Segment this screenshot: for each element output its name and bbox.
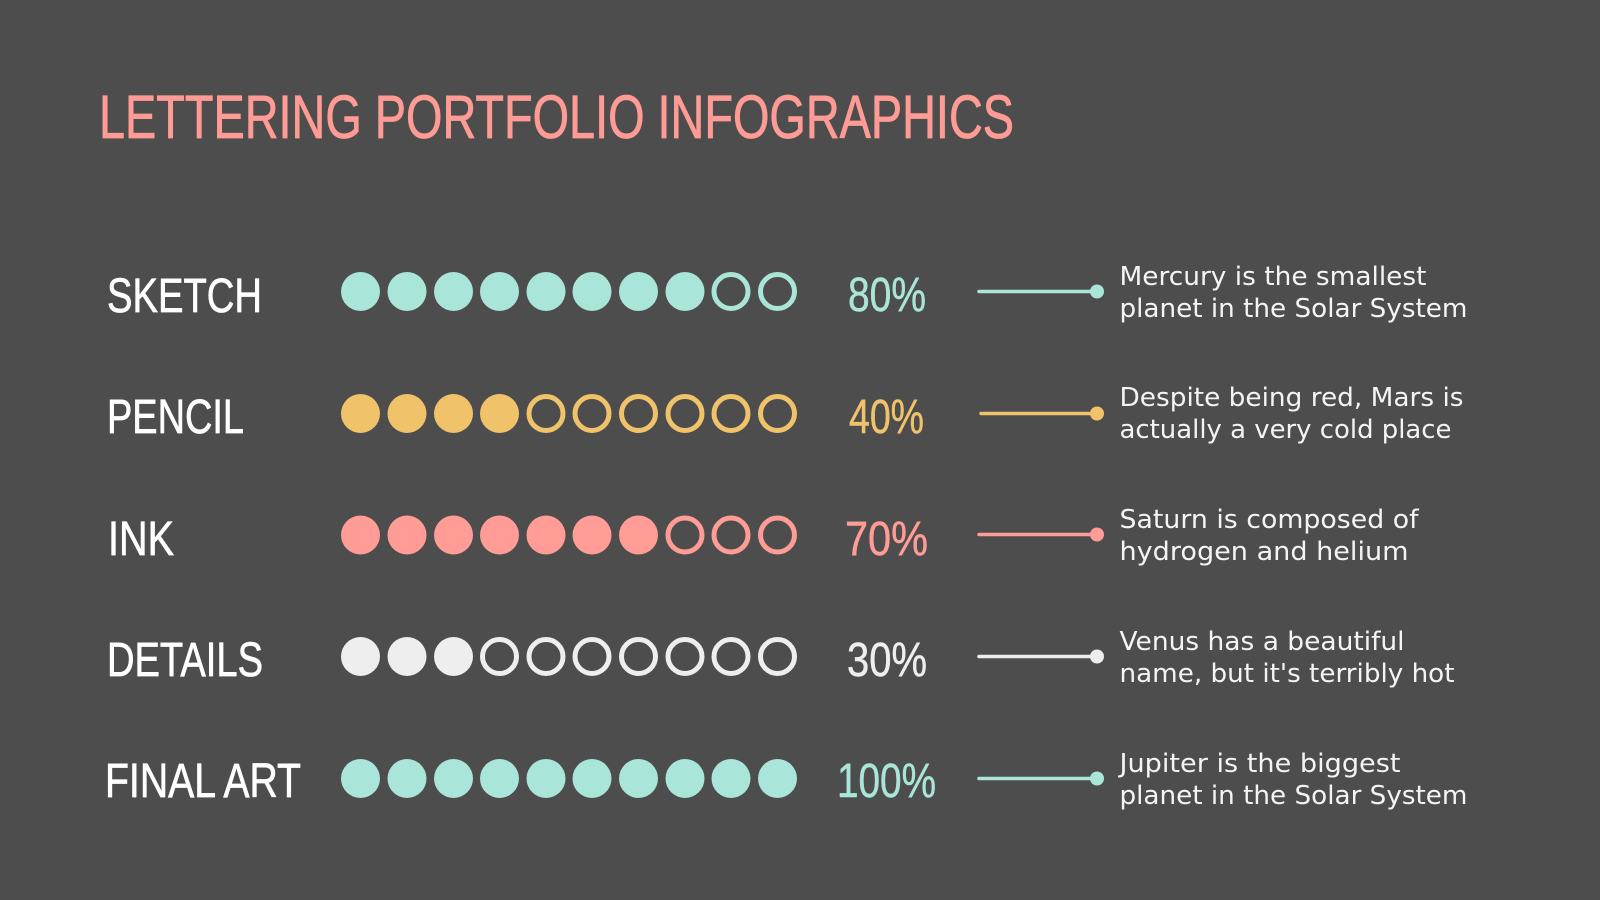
description: sketch: planet in the Solar System — [1120, 294, 1468, 324]
row: sketch — [107, 262, 1468, 324]
description: ink: Saturn is composed of — [1120, 505, 1419, 535]
row: pencil — [107, 383, 1464, 445]
description: pencil: Despite being red, Mars is — [1120, 383, 1464, 413]
percentage: 80%: 80% — [848, 269, 926, 322]
connector: details — [979, 650, 1104, 664]
label: details: DETAILS — [107, 634, 263, 687]
row: final art — [105, 749, 1468, 811]
percentage: 70%: 70% — [845, 513, 928, 566]
label: final art: FINAL ART — [105, 755, 301, 808]
dot rating: 70% — [341, 516, 794, 554]
percentage: 40%: 40% — [849, 391, 924, 444]
dot rating: 100% — [341, 759, 797, 798]
percentage: 100%: 100% — [837, 755, 936, 808]
description: final art: Jupiter is the biggest — [1117, 749, 1400, 779]
title: LETTERING PORTFOLIO INFOGRAPHICS — [99, 83, 1014, 151]
description: details: name, but it's terribly hot — [1120, 659, 1454, 689]
description: pencil: actually a very cold place — [1120, 415, 1452, 445]
dot rating: 30% — [341, 637, 794, 676]
row: details — [107, 627, 1454, 689]
description: details: Venus has a beautiful — [1120, 627, 1404, 657]
description: final art: planet in the Solar System — [1120, 781, 1468, 811]
connector: final art — [979, 772, 1104, 786]
connector: sketch — [979, 284, 1104, 298]
percentage: 30%: 30% — [847, 634, 927, 687]
label: pencil: PENCIL — [107, 391, 244, 444]
dot rating: 40% — [341, 394, 794, 433]
row: ink — [108, 505, 1419, 567]
label: sketch: SKETCH — [107, 270, 262, 323]
description: ink: hydrogen and helium — [1120, 537, 1408, 567]
label: ink: INK — [108, 513, 174, 566]
connector: ink — [979, 528, 1104, 542]
dot rating: 80% — [341, 272, 794, 311]
description: sketch: Mercury is the smallest — [1120, 262, 1426, 292]
connector: pencil — [981, 406, 1104, 420]
